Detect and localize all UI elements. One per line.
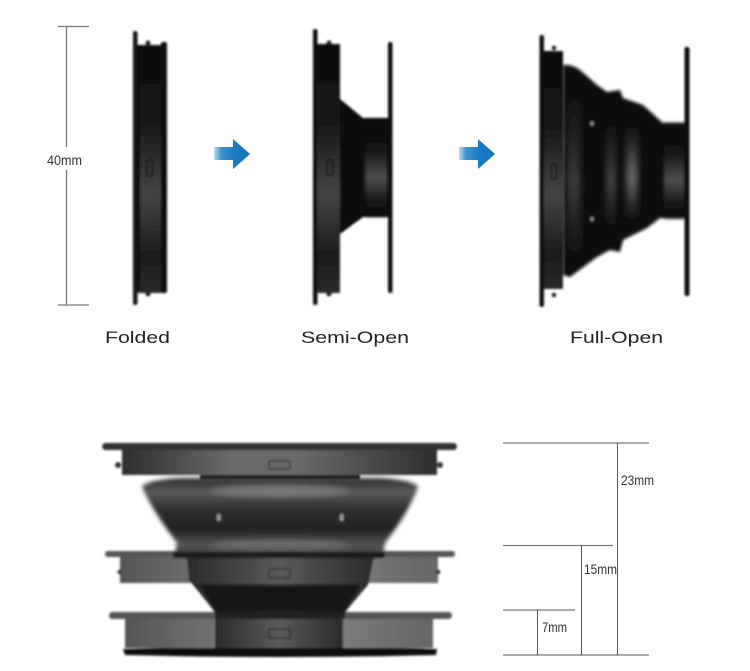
device: semi-open side view bbox=[313, 29, 392, 305]
label: Full-Open: Full-Open bbox=[570, 328, 663, 347]
label: Semi-Open: Semi-Open bbox=[301, 328, 409, 347]
middle position bbox=[105, 551, 455, 612]
device: folded side view bbox=[133, 31, 167, 305]
lowest position bbox=[109, 612, 452, 657]
dimension: 40mm height bbox=[47, 26, 89, 305]
state labels bbox=[105, 328, 663, 347]
label: 40mm: 40mm bbox=[47, 152, 82, 168]
device: front view with stacked heights bbox=[102, 443, 457, 657]
dimension: heights bbox=[503, 443, 654, 655]
arrow: folded to semi-open bbox=[214, 139, 250, 169]
label: Folded: Folded bbox=[105, 328, 170, 347]
label: 15mm: 15mm bbox=[584, 562, 617, 577]
device: full-open side view bbox=[540, 35, 690, 307]
label: 7mm: 7mm bbox=[542, 620, 567, 635]
top bellows bbox=[142, 478, 418, 557]
top position bbox=[102, 443, 457, 479]
arrow: semi-open to full-open bbox=[459, 139, 495, 169]
label: 23mm: 23mm bbox=[621, 473, 654, 488]
